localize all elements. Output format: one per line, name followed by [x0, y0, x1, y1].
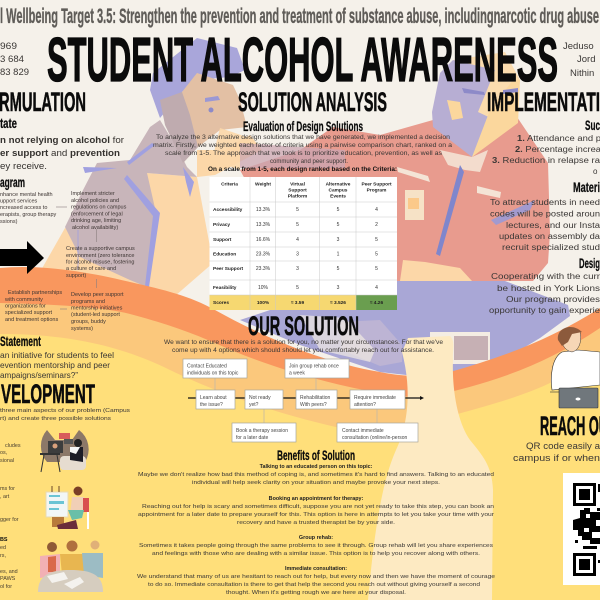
decision matrix table: 4 [375, 285, 378, 291]
analysis text: scale from 1-5. The approach that we took is to prioritize education, prevention, as well as [165, 150, 442, 157]
diagram: causes and interventions: alcohol policies and [71, 198, 119, 204]
solution two text: ms for [0, 486, 15, 492]
solution three text: BS [0, 537, 8, 543]
decision matrix table: 13.3% [256, 207, 271, 213]
materials text: recruit specialized stud [502, 243, 600, 252]
decision timeline: With peers? [300, 402, 327, 408]
heading: our solution: OUR SOLUTION [248, 311, 359, 341]
decision matrix table: Support [288, 188, 307, 194]
icon: three students at a table [38, 540, 103, 592]
decision matrix table: 23.3% [256, 252, 271, 258]
diagram: causes and interventions: with community [4, 297, 43, 303]
decision matrix table: Education [213, 252, 236, 258]
decision matrix table: ≈ 3.59 [291, 300, 304, 306]
benefit: booking an appointment: Booking an appointment for therapy: [269, 496, 364, 502]
QR code [563, 473, 600, 585]
development intro: three main aspects of our problem (Campus [0, 408, 130, 414]
background: cream bottle shape [368, 336, 493, 600]
development intro: rt) and create three possible solutions [0, 416, 111, 422]
decision timeline [183, 359, 424, 442]
decision timeline: Rehabilitation [300, 395, 331, 401]
benefit: group rehab: and feelings with those who are dealing with a similar issue. This option is to help you recover along with others. [152, 551, 480, 557]
numbered success list: 3. Reduction in relapse ra [492, 156, 600, 165]
background: orange, light orange and yellow waves [0, 267, 600, 600]
decision matrix table: Scores [213, 300, 229, 306]
subheading: state: tate [0, 115, 17, 131]
decision matrix table: 5 [337, 222, 340, 228]
benefit: talking to an educated person: Maybe we don't realize how bad this method of coping is, and sometimes it's hard to find answers. Talking to an educated [138, 472, 494, 478]
icon: painter at easel [46, 486, 89, 529]
diagram: causes and interventions: a culture of care and [66, 266, 116, 272]
solution one text: sional [0, 458, 14, 464]
student numbers: 3 684 [0, 54, 24, 65]
solution one text [0, 443, 21, 464]
student numbers: 83 829 [0, 67, 29, 78]
analysis text: On a scale from 1-5, each design ranked based on the Criteria: [208, 166, 397, 173]
decision matrix table: Program [367, 188, 386, 194]
decision matrix table: 5 [296, 207, 299, 213]
panel: problem statement: ampaigns/seminars?” [0, 371, 78, 380]
decision matrix table: 3 [296, 252, 299, 258]
decision matrix table: 10% [258, 285, 269, 291]
decision matrix table: Campus [329, 188, 348, 194]
decision matrix table: Platform [288, 194, 307, 200]
decision timeline: Join group rehab once [289, 364, 339, 370]
decision matrix table: 100% [257, 300, 270, 306]
team names: Jord [577, 54, 595, 65]
analysis text: To analyze the 3 alternative design solutions that we have generated, we implemented a decision [156, 134, 451, 141]
benefit: immediate consultation: Immediate consultation: [285, 566, 347, 572]
diagram: causes and interventions [0, 191, 135, 332]
solution one text: os, [0, 450, 8, 456]
diagram: causes and interventions: systems) [71, 326, 93, 332]
design text [489, 272, 600, 315]
team names: Jeduso [563, 41, 594, 52]
decision matrix table: 2 [375, 222, 378, 228]
decision matrix table: 13.3% [256, 222, 271, 228]
decision matrix table: Accessibility [213, 207, 243, 213]
decision matrix table: 23.3% [256, 266, 271, 272]
decision timeline: Book a therapy session [236, 428, 288, 434]
benefit: immediate consultation: We understand that many of us are hesitant to reach out for help, but every now and then we have the moment of courage [137, 574, 495, 580]
decision timeline: Learn about [200, 395, 227, 401]
decision timeline: Not ready [249, 395, 271, 401]
illustration: left man with blue hair [40, 38, 262, 300]
numbered success list: 2. Percentage increa [515, 145, 600, 154]
reach out text: campus if or when [513, 453, 600, 463]
state text [0, 135, 124, 172]
diagram: causes and interventions: Create a supportive campus [66, 246, 135, 252]
development intro [0, 408, 130, 422]
benefit: immediate consultation [137, 566, 495, 596]
materials text [490, 198, 600, 252]
solution two text: , art [0, 494, 10, 500]
solution three text: PAWS [0, 576, 16, 582]
student numbers: 969 [0, 41, 17, 52]
decision timeline: Contact immediate [342, 428, 384, 434]
benefit: booking an appointment: recovery and have a trusted therapist be by your side. [237, 520, 395, 526]
decision matrix table: 5 [337, 266, 340, 272]
heading: formulation: RMULATION [0, 87, 86, 117]
diagram: causes and interventions: environment (zero tolerance [66, 253, 134, 259]
decision timeline: yet? [249, 402, 259, 408]
diagram: causes and interventions: groups, buddy [71, 319, 106, 325]
illustration: man with laptop [550, 327, 600, 408]
decision matrix table: Events [330, 194, 346, 200]
diagram: causes and interventions: and treatment options [5, 317, 58, 323]
decision timeline: a week [289, 370, 305, 376]
heading: development: VELOPMENT [1, 379, 95, 409]
team names [563, 41, 595, 79]
solution three text: ed [0, 545, 6, 551]
benefit: group rehab [139, 535, 493, 557]
diagram: causes and interventions: erapists, group therapy [0, 212, 57, 218]
decision timeline: Contact Educated [187, 364, 227, 370]
design text: be hosted in York Lions [497, 284, 600, 293]
benefit: booking an appointment [138, 496, 494, 526]
diagram: causes and interventions: regulations on campus [71, 204, 127, 210]
diagram: causes and interventions: Establish partnerships [8, 290, 62, 296]
design text: Our program provides [506, 295, 600, 304]
benefit: talking to an educated person [138, 464, 494, 486]
diagram: causes and interventions: alcohol availability) [72, 225, 118, 231]
diagram: causes and interventions: Implement stricter [71, 191, 115, 197]
reach out text: QR code easily a [526, 441, 600, 451]
materials text: To attract students in need [490, 198, 600, 207]
diagram: causes and interventions: specialized support [5, 310, 53, 316]
benefit: talking to an educated person: individual will help seek clarity on your situation and maybe provoke your next steps. [192, 480, 440, 486]
benefit: talking to an educated person: Talking to an educated person on this topic: [260, 464, 373, 470]
decision matrix table: 5 [296, 222, 299, 228]
student numbers [0, 41, 29, 78]
panel: solution analysis [153, 87, 453, 310]
numbered success list [492, 134, 600, 176]
diagram: causes and interventions: for alcohol misuse, fostering [66, 260, 134, 266]
panel: benefits of solution [137, 447, 495, 596]
benefit: group rehab: Sometimes it takes people going through the same problems to see it through. Group rehab will let you share experiences [139, 543, 493, 549]
diagram: causes and interventions: programs and [71, 299, 105, 305]
diagram: causes and interventions: (student-led support [71, 312, 120, 318]
decision matrix table: Peer Support [213, 266, 244, 272]
decision matrix table: Privacy [213, 222, 230, 228]
decision matrix table: Weight [255, 182, 271, 188]
decision matrix table: 5 [375, 266, 378, 272]
decision matrix table: 5 [337, 207, 340, 213]
solution one text: cludes [5, 443, 21, 449]
panel: reach out [513, 411, 600, 585]
decision timeline: for a later date [236, 435, 268, 441]
decision matrix table: Peer Support [361, 182, 392, 188]
decision matrix table: 1 [337, 252, 340, 258]
decision matrix table: 4 [296, 237, 299, 243]
decision matrix table [210, 177, 397, 310]
solution intro: come up with 4 options which should should let you comfortably reach out for assistance. [172, 347, 434, 354]
solution three text: ol for [0, 584, 12, 590]
benefit: immediate consultation: thought. When it's getting rough we are here at your disposal. [226, 590, 406, 596]
state text: er support and prevention [0, 148, 120, 159]
analysis text: community and peer support. [270, 158, 348, 165]
decision matrix table: 3 [296, 266, 299, 272]
subheading: diagram: agram [0, 174, 25, 190]
decision timeline: individuals on this topic [187, 370, 239, 376]
decision timeline: consultation (online/in-person [342, 435, 408, 441]
solution two text [0, 486, 19, 523]
decision matrix table: 5 [375, 252, 378, 258]
panel: our solution [164, 311, 444, 442]
numbered success list: 1. Attendance and p [517, 134, 600, 143]
decision timeline: Require immediate [354, 395, 396, 401]
diagram: causes and interventions: mentorship initiatives [71, 306, 123, 312]
benefit: booking an appointment: Reaching out for help is scary and sometimes difficult, suppose you are not yet ready to take this step, you can book an [142, 504, 494, 510]
solution intro [164, 339, 444, 354]
decision matrix table: 5 [375, 237, 378, 243]
diagram: causes and interventions: ncreased access to [0, 205, 47, 211]
decision matrix table: Virtual [290, 182, 305, 188]
decision matrix table: 16.6% [256, 237, 271, 243]
analysis text: matrix. Firstly, we weighted each factor of criteria using a pairwise comparison chart, ranked on a [153, 142, 453, 149]
benefit: group rehab: Group rehab: [299, 535, 333, 541]
decision matrix table: Support [213, 237, 232, 243]
reach out text [513, 441, 600, 463]
design text: opportunity to gain experie [489, 306, 600, 315]
state text: ey receive. [0, 161, 47, 172]
benefit: booking an appointment: appointment for a later date to prepare yourself for this. This option is here in attempts to let you take your time with your [138, 512, 494, 518]
diagram: causes and interventions: nhance mental health [0, 192, 53, 198]
materials text: updates on assembly da [499, 232, 600, 241]
subheading: evaluation of design solutions: Evaluation of Design Solutions [243, 118, 363, 134]
decision timeline: the issue? [200, 402, 223, 408]
decision matrix table: 3 [337, 237, 340, 243]
decision matrix table: Alternative [326, 182, 351, 188]
heading: benefits: Benefits of Solution [277, 447, 355, 463]
diagram: causes and interventions: ssions) [0, 219, 18, 225]
panel: problem statement: evention mentorship and peer [0, 361, 110, 370]
state text: n not relying on alcohol for [0, 135, 124, 146]
benefit: immediate consultation: to do so. Immediate consultation is there to get that help the second you reach out without giving yourself a second [148, 582, 480, 588]
decision matrix table: 5 [296, 285, 299, 291]
solution three text: rs, [0, 553, 6, 559]
materials text: lectures, and our Insta [506, 221, 600, 230]
team names: Nithin [570, 68, 594, 79]
solution two text: gger for [0, 517, 19, 523]
panel: development [0, 379, 130, 592]
decision matrix table: 4 [375, 207, 378, 213]
background: periwinkle desk [240, 281, 570, 380]
decision timeline: attention? [354, 402, 376, 408]
panel: problem statement: Statement [0, 333, 41, 349]
diagram: causes and interventions: support) [66, 273, 86, 279]
decision matrix table: Feasibility [213, 285, 237, 291]
solution intro: We want to ensure that there is a solution for you, no matter your circumstances. For that we've [164, 339, 444, 346]
panel: problem formulation [0, 87, 124, 190]
panel: implementation [487, 87, 600, 315]
design text: Cooperating with the curr [491, 272, 600, 281]
icon: virtual therapy person [40, 430, 89, 472]
analysis text [153, 134, 453, 173]
panel: problem statement: an initiative for students to feel [0, 351, 114, 360]
heading: solution analysis: SOLUTION ANALYSIS [238, 87, 387, 117]
diagram: causes and interventions: Develop peer support [71, 292, 124, 298]
panel: problem statement [0, 333, 114, 380]
decision matrix table: ≈ 3.526 [330, 300, 346, 306]
illustration: right man in salmon jacket [212, 52, 550, 281]
solution three text: es, and [0, 569, 18, 575]
solution three text [0, 537, 18, 590]
diagram: causes and interventions: drinking age, limiting [71, 218, 121, 224]
decision matrix table: ≈ 4.26 [370, 300, 383, 306]
diagram: causes and interventions: organizations for [5, 304, 46, 310]
decision matrix table: Criteria [221, 182, 238, 188]
materials text: codes will be posted aroun [490, 210, 600, 218]
diagram: causes and interventions: upport services [0, 198, 38, 204]
numbered success list: o [593, 167, 598, 176]
arrow [0, 241, 44, 274]
diagram: causes and interventions: (enforcement of legal [71, 212, 123, 218]
decision matrix table: 3 [337, 285, 340, 291]
